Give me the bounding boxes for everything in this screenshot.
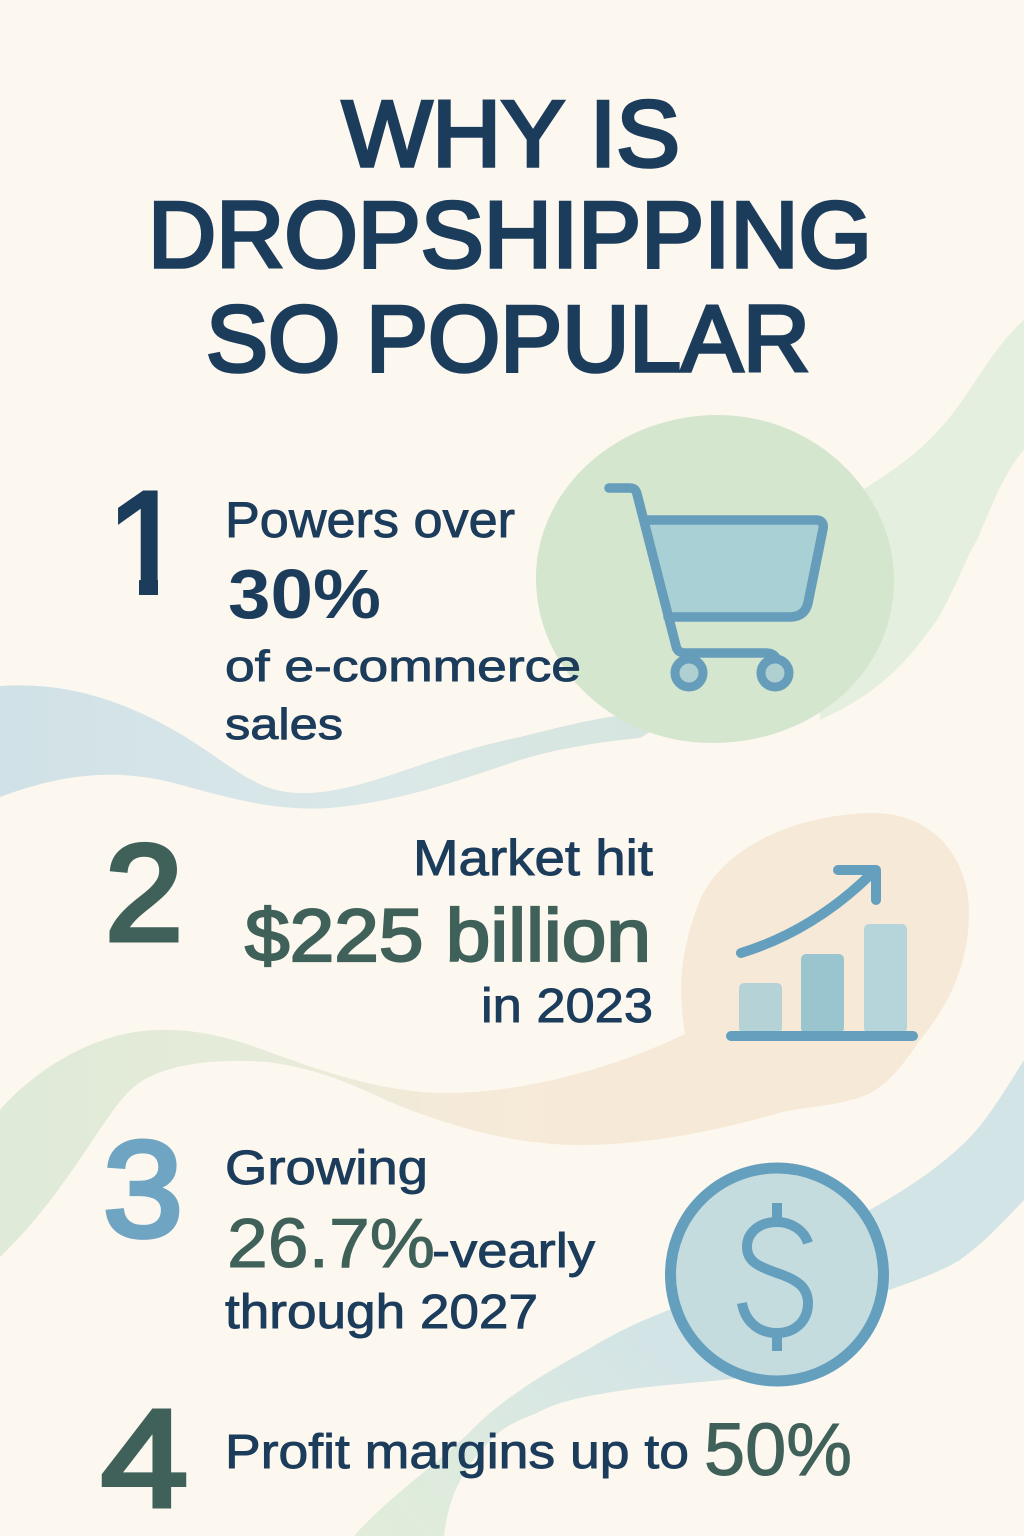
text: growing 26.7% yearly: Growing <box>225 1142 428 1195</box>
item 4 <box>101 1382 852 1536</box>
text: growing 26.7% yearly: -vearly <box>432 1225 595 1278</box>
icon: shopping cart <box>536 415 894 743</box>
text: growing 26.7% yearly <box>225 1142 595 1339</box>
item 3 <box>103 1113 884 1381</box>
text: market hit $225 billion: Market hit <box>413 830 653 886</box>
wave: lower green to orange <box>0 813 969 1257</box>
item 1 <box>106 415 894 749</box>
title: DROPSHIPPING <box>148 182 872 287</box>
item 2 <box>105 817 918 1041</box>
text: powers over 30% <box>225 492 581 749</box>
title: SO POPULAR <box>206 286 810 391</box>
text: profit margins up to 50% <box>225 1408 852 1491</box>
title: WHY IS <box>342 81 680 186</box>
wave: lower blue to green <box>354 1306 740 1536</box>
text: market hit $225 billion: in 2023 <box>481 980 653 1033</box>
wave: left blue <box>0 685 670 809</box>
number 1: 1 <box>106 461 187 624</box>
text: growing 26.7% yearly: through 2027 <box>225 1286 538 1339</box>
text: powers over 30%: sales <box>225 700 343 749</box>
text: profit margins up to 50%: 50% <box>704 1408 852 1491</box>
wave: upper right green <box>820 320 1024 720</box>
number 2: 2 <box>105 817 183 970</box>
wave: right blue upper <box>840 1060 1024 1300</box>
number 4: 4 <box>101 1382 188 1536</box>
text: powers over 30%: 30% <box>228 555 381 633</box>
text: market hit $225 billion <box>245 830 653 1033</box>
text: profit margins up to 50%: Profit margins up to <box>225 1426 689 1479</box>
icon: growth chart <box>726 870 918 1041</box>
text: growing 26.7% yearly: 26.7% <box>227 1204 435 1282</box>
title <box>148 81 872 391</box>
text: market hit $225 billion: $225 billion <box>245 894 651 977</box>
text: powers over 30%: Powers over <box>225 492 515 548</box>
number 3: 3 <box>103 1113 183 1265</box>
icon: dollar coin <box>670 1168 884 1381</box>
text: powers over 30%: of e-commerce <box>225 642 581 691</box>
